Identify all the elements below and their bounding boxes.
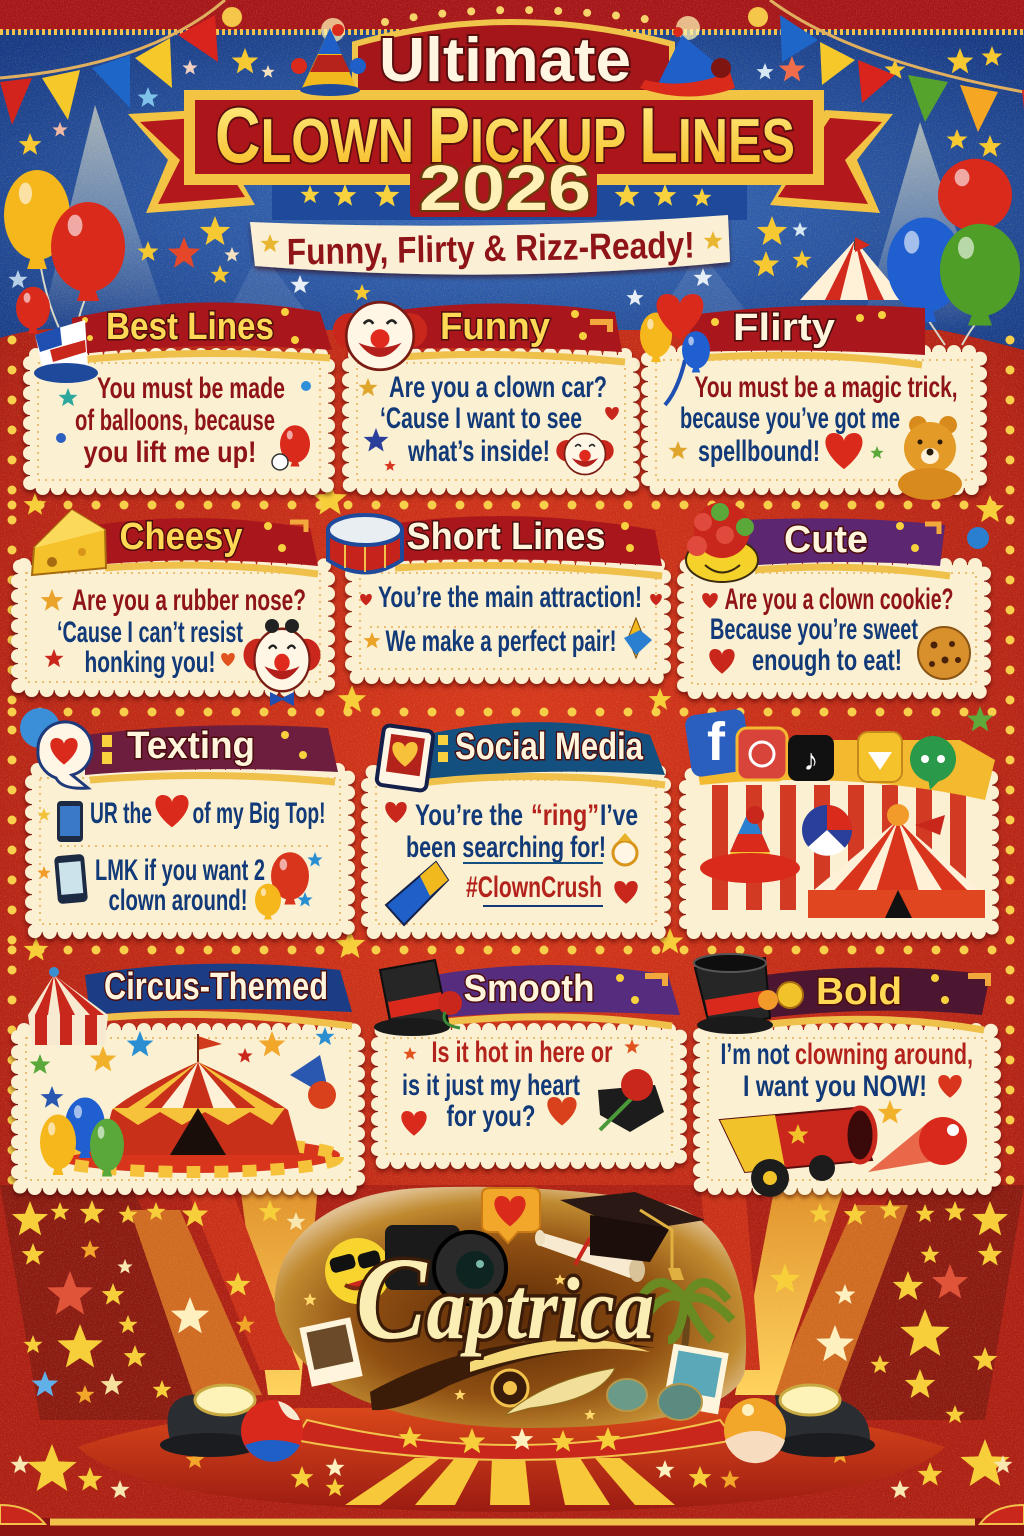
banner xyxy=(765,968,990,1030)
panel: social platforms xyxy=(684,708,995,932)
card text: because you’ve got me xyxy=(680,402,900,435)
banner: Best Lines xyxy=(106,306,274,348)
banner xyxy=(385,516,662,576)
panel: texting xyxy=(20,708,348,932)
banner xyxy=(85,725,338,782)
icon: balloon and glove xyxy=(56,381,311,470)
balloons right xyxy=(887,159,1020,345)
card icons xyxy=(702,593,970,679)
card text: been searching for! xyxy=(406,831,606,864)
card text: Are you a rubber nose? xyxy=(72,584,306,617)
lower background rays xyxy=(0,1185,1024,1536)
bunting left xyxy=(0,0,242,125)
card xyxy=(686,775,992,932)
card text xyxy=(380,371,607,468)
card text xyxy=(710,583,954,677)
card text xyxy=(402,1036,613,1133)
spotlight right xyxy=(775,1385,875,1457)
banner: Cheesy xyxy=(120,516,242,558)
icon: big top tent xyxy=(50,1034,340,1173)
stage xyxy=(0,1408,1024,1536)
arch plate xyxy=(321,10,700,105)
balloons left xyxy=(4,170,125,334)
banner xyxy=(385,722,665,785)
card xyxy=(684,565,984,692)
banner xyxy=(385,304,625,362)
panel: circus-themed xyxy=(18,964,358,1188)
icon: tablet xyxy=(376,725,434,791)
card xyxy=(352,565,664,677)
background: blue sky xyxy=(0,30,1024,350)
panel: funny xyxy=(333,302,633,488)
panel: cheesy xyxy=(18,510,328,706)
icon: ball xyxy=(802,805,852,856)
banner xyxy=(745,518,950,576)
banner xyxy=(95,516,318,574)
icon: facebook xyxy=(684,708,752,778)
subtitle ribbon: Funny, Flirty & Rizz-Ready! xyxy=(286,224,695,273)
ribbon tails xyxy=(128,110,893,213)
card xyxy=(349,355,633,488)
card text: You’re the main attraction! xyxy=(378,581,642,614)
card text xyxy=(406,799,638,906)
icon: top hat with rosette xyxy=(694,954,803,1034)
card text xyxy=(57,584,306,679)
stage rim xyxy=(295,1420,735,1460)
card text: ‘Cause I want to see xyxy=(380,402,582,435)
icon: small tent xyxy=(28,967,108,1045)
panel: flirty xyxy=(640,294,980,500)
stage floor rays xyxy=(345,1458,675,1505)
icon: facebook: f xyxy=(707,712,726,772)
main red plate xyxy=(195,100,813,174)
bunting right xyxy=(748,0,1024,132)
card text: I’ve xyxy=(600,799,638,832)
heading: Ultimate: Ultimate xyxy=(379,26,631,95)
card xyxy=(378,1030,680,1162)
icon: tiktok: ♪ xyxy=(804,744,818,777)
card text: #ClownCrush xyxy=(466,871,602,904)
icon: feather xyxy=(505,1368,615,1415)
card text: for you? xyxy=(446,1100,536,1133)
icon: heart and balloons xyxy=(640,294,710,405)
circus tent top right xyxy=(800,237,905,300)
icon: aperture xyxy=(492,1370,528,1406)
banner xyxy=(695,740,995,800)
stage stars xyxy=(186,1445,850,1496)
icon: chat bubble xyxy=(910,736,956,790)
card text: “ring” xyxy=(531,799,599,832)
card text: honking you! xyxy=(84,646,216,679)
heading: year: 2026 xyxy=(419,152,591,224)
banner xyxy=(72,302,332,360)
logo sparkles xyxy=(303,1274,596,1420)
logo: Captrica xyxy=(275,1187,746,1428)
panel: smooth xyxy=(374,960,680,1162)
banner xyxy=(690,305,925,365)
icon: clown face xyxy=(333,302,427,370)
icon: camera xyxy=(385,1225,506,1304)
card text: You must be made xyxy=(97,372,285,405)
icon: diploma xyxy=(535,1230,645,1282)
card xyxy=(30,355,328,488)
icon: cheese xyxy=(32,510,106,575)
gap stars xyxy=(24,482,1004,961)
card text: We make a perfect pair! xyxy=(386,625,616,658)
card text: you lift me up! xyxy=(84,436,256,469)
card text: UR the xyxy=(90,797,152,830)
icon: striped top hat xyxy=(34,320,98,383)
banner: Cute xyxy=(784,519,868,561)
card xyxy=(648,352,980,488)
icon: sunglasses emoji xyxy=(325,1238,391,1304)
card text xyxy=(680,371,958,468)
icon: sunglasses xyxy=(607,1379,702,1420)
striped curtain xyxy=(712,785,966,910)
icon: polaroid right xyxy=(663,1344,729,1414)
banner: Smooth xyxy=(464,968,594,1010)
card xyxy=(18,1030,358,1188)
card text: Are you a clown car? xyxy=(389,371,607,404)
card icons xyxy=(360,594,662,658)
panel: bold xyxy=(694,954,994,1197)
card xyxy=(368,772,664,932)
banner: Texting xyxy=(127,725,255,767)
panel: social media xyxy=(368,722,665,932)
spotlight left xyxy=(160,1385,260,1457)
card icons xyxy=(358,378,619,474)
icon: tent xyxy=(808,804,985,918)
panel: short lines xyxy=(328,515,664,677)
logo wordmark: Captrica xyxy=(356,1233,654,1364)
year plate xyxy=(410,165,597,217)
icon: instagram xyxy=(737,728,787,780)
card text: I’m not xyxy=(720,1038,790,1071)
icon: cannonball xyxy=(868,1117,967,1172)
icon: palm tree xyxy=(640,1282,732,1370)
card text: You’re the xyxy=(415,799,523,832)
icon: polaroid left xyxy=(299,1317,363,1387)
banner: Short Lines xyxy=(406,516,606,558)
icon: beach ball left xyxy=(241,1400,303,1462)
card text: I want you NOW! xyxy=(743,1070,927,1103)
card text: spellbound! xyxy=(698,435,820,468)
banner xyxy=(435,965,680,1026)
card text xyxy=(720,1038,973,1103)
card text: clown around! xyxy=(108,884,248,917)
icon: clown hat xyxy=(700,806,800,883)
banner: Bold xyxy=(816,971,902,1013)
icon: beach ball right xyxy=(724,1398,786,1463)
banner: Funny xyxy=(440,306,550,348)
card text: what’s inside! xyxy=(407,435,550,468)
icon: heart speech bubble xyxy=(482,1188,540,1243)
card text: Is it hot in here or xyxy=(432,1036,613,1069)
card icons xyxy=(37,801,323,920)
card text: LMK if you want 2 xyxy=(95,854,265,887)
title block xyxy=(128,10,893,275)
icon: drum xyxy=(328,515,402,572)
logo swoosh xyxy=(370,1339,655,1410)
card text: enough to eat! xyxy=(752,644,902,677)
heading: Clown Pickup Lines: CLOWN PICKUP LINES xyxy=(215,91,795,179)
banner xyxy=(85,964,352,1026)
icon: graduation cap xyxy=(560,1192,705,1280)
icon: juggling clown xyxy=(686,502,989,582)
card text xyxy=(370,581,650,658)
banner: Circus-Themed xyxy=(104,966,328,1008)
card text: of balloons, because xyxy=(75,404,275,437)
card icons xyxy=(401,1039,664,1136)
confetti stars xyxy=(30,1027,336,1109)
blue strip with stars xyxy=(272,183,747,220)
banner: Flirty xyxy=(733,307,835,349)
icon: heart speech bubble xyxy=(20,708,92,788)
lower stars xyxy=(10,1199,1012,1498)
bottom border xyxy=(0,1505,1024,1536)
stage platform xyxy=(78,1408,945,1512)
sky stars xyxy=(8,46,1002,305)
logo background blob xyxy=(275,1187,746,1428)
icon: teddy bear xyxy=(668,416,962,500)
card text xyxy=(60,795,330,917)
background: bulb rows xyxy=(12,340,1014,1190)
card text: is it just my heart xyxy=(402,1069,580,1102)
icon: tiktok xyxy=(788,735,834,781)
card text: Because you’re sweet xyxy=(710,613,918,646)
icon: balloons xyxy=(40,1098,124,1176)
card text xyxy=(75,372,285,469)
main yellow plate xyxy=(184,90,824,185)
icon: top hat and rose xyxy=(374,960,462,1036)
icon: clown hat left xyxy=(291,24,366,96)
panel: cute xyxy=(684,502,989,692)
icon: cannon xyxy=(720,1075,962,1197)
spotlights in sky xyxy=(40,105,990,330)
background: top red band xyxy=(0,0,1024,32)
icon: clown hat right xyxy=(640,27,735,96)
card xyxy=(700,1030,994,1188)
card icons xyxy=(385,802,638,925)
card icons xyxy=(41,589,320,706)
card text: ‘Cause I can’t resist xyxy=(57,616,243,649)
card xyxy=(18,565,328,690)
card xyxy=(32,770,348,932)
card text: of my Big Top! xyxy=(192,797,326,830)
panel: best lines xyxy=(30,302,332,488)
banner: Social Media xyxy=(455,726,644,768)
icon: snapchat xyxy=(858,732,902,782)
